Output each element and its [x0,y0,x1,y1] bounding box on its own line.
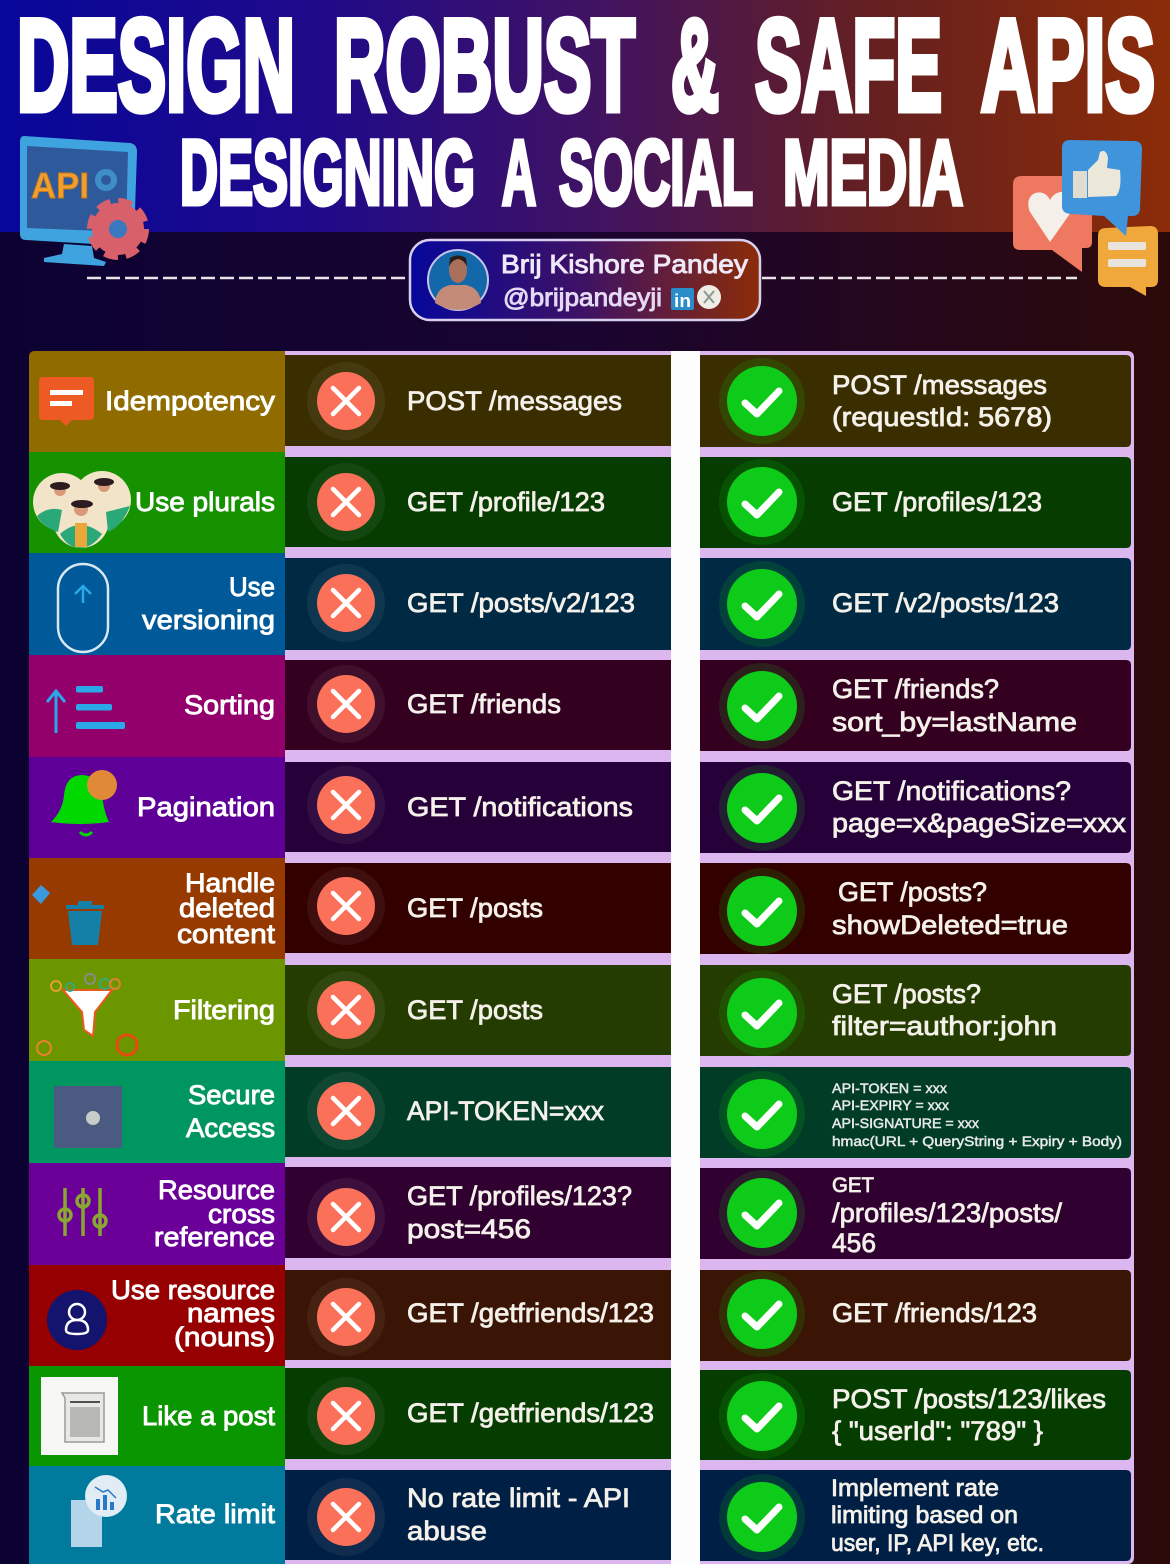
good example: GET /friends/123 [832,1298,1037,1328]
bad example: GET /posts [407,995,543,1025]
icon: rate chart [71,1475,127,1547]
good icon [719,459,805,545]
row 4: sorting [29,655,1131,757]
bad icon [307,1377,385,1455]
good example [832,877,1068,940]
bad icon [307,362,385,440]
label [111,1275,275,1352]
icon: social reactions [1013,140,1158,296]
row 6: handle deleted content [29,858,1131,959]
bad icon [307,1278,385,1356]
title [17,0,1155,138]
good example: GET /notifications? [832,776,1071,806]
icon: document [41,1377,118,1455]
label: (nouns) [174,1322,275,1352]
good example: POST /messages [832,370,1047,400]
label cell [29,1163,285,1265]
bad example: No rate limit - API [407,1483,630,1513]
good example: limiting based on [831,1502,1018,1529]
bad icon [307,463,385,541]
icon: scroll mouse [58,564,108,652]
label: cross [208,1199,275,1229]
label: Idempotency [105,386,276,416]
label cell [29,757,285,858]
good example: GET /posts? [832,979,981,1009]
label cell [29,553,285,655]
row 2: use plurals [29,452,1131,553]
good icon [719,970,805,1056]
subtitle: SOCIAL [559,122,753,224]
icon: bell [51,770,117,835]
label: Secure [188,1080,275,1110]
good example: hmac(URL + QueryString + Expiry + Body) [832,1133,1122,1149]
good example: POST /posts/123/likes [832,1384,1106,1414]
label: versioning [142,605,275,635]
icon: people [33,471,131,548]
bad example: API-TOKEN=xxx [407,1096,604,1126]
label cell [29,452,285,553]
label [177,868,276,949]
good icon [719,358,805,444]
good example: /profiles/123/posts/ [832,1198,1062,1228]
white column separator [671,351,700,1564]
bad icon [307,766,385,844]
icon: API monitor with gear: API [31,165,89,206]
row 7: filtering [29,959,1131,1061]
author handle: @brijpandeyji [503,284,662,312]
good icon [719,1170,805,1256]
good example [831,1475,1044,1557]
divider dashes left [87,277,408,279]
label: Like a post [142,1401,275,1431]
bad icon [307,564,385,642]
good example: API-EXPIRY = xxx [832,1097,949,1113]
good example: sort_by=lastName [832,707,1077,737]
icon: sort [47,686,125,733]
good example: filter=author:john [832,1011,1057,1041]
label cell [29,1466,285,1564]
label: Use [229,572,275,602]
good example [832,1080,1122,1149]
bad icon [307,665,385,743]
good icon [719,868,805,954]
bad example [407,1483,630,1546]
label [142,572,275,635]
bad example: GET /notifications [407,792,633,822]
bad icon [307,1072,385,1150]
bad example: GET /profiles/123? [407,1181,632,1211]
icon: x [697,285,721,309]
label: Access [186,1113,275,1143]
good example: GET [832,1174,874,1197]
label: Pagination [137,792,275,822]
good example [832,370,1052,432]
good example: page=x&pageSize=xxx [832,808,1127,838]
label cell [29,1265,285,1366]
label: deleted [179,893,275,923]
good example [832,979,1057,1041]
label: content [177,919,276,949]
good example [832,776,1127,838]
icon: funnel [37,974,137,1055]
icon: linkedin: in [674,291,691,311]
row 10: use resource names [29,1265,1131,1366]
good example: user, IP, API key, etc. [831,1530,1044,1557]
good icon [719,1474,805,1560]
label cell [29,858,285,959]
label: Rate limit [155,1499,276,1529]
label: names [187,1298,275,1328]
bad example [407,1181,632,1244]
icon: safe [54,1086,122,1148]
row 5: pagination [29,757,1131,858]
good icon [719,561,805,647]
good example: 456 [832,1228,876,1258]
good example: GET /posts? [838,877,987,907]
bad example: GET /posts [407,893,543,923]
label: reference [154,1222,275,1252]
good example: showDeleted=true [832,910,1068,940]
label cell [29,1366,285,1466]
good example: GET /v2/posts/123 [832,588,1059,618]
good example [832,1384,1106,1446]
row 3: use versioning [29,553,1131,655]
subtitle: MEDIA [783,122,963,224]
good example [832,1174,1062,1258]
subtitle [180,122,963,224]
icon: trash [32,885,104,945]
good example: GET /friends? [832,674,999,704]
bad example: GET /getfriends/123 [407,1298,654,1328]
label cell [29,1061,285,1163]
header band [0,0,1170,232]
icon: sliders [59,1188,106,1236]
bad example: GET /posts/v2/123 [407,588,635,618]
icon: message [39,377,94,426]
pink row backing [285,351,671,1564]
good icon [719,1373,805,1459]
label: Filtering [173,995,275,1025]
row 9: resource cross reference [29,1163,1131,1265]
row 11: like a post [29,1366,1131,1466]
bad example: GET /friends [407,689,561,719]
icon: user badge [47,1290,107,1350]
avatar [428,250,488,310]
good example: (requestId: 5678) [832,402,1052,432]
author name: Brij Kishore Pandey [501,249,748,279]
divider dashes right [762,277,1077,279]
label: Use resource [111,1275,275,1305]
bad example: GET /getfriends/123 [407,1398,654,1428]
right column backing [690,351,1134,1564]
bad example: POST /messages [407,386,622,416]
bad icon [307,867,385,945]
good example [832,674,1077,737]
icon: API monitor with gear [20,136,146,266]
bad example: post=456 [407,1214,531,1244]
good example: Implement rate [831,1475,999,1502]
good icon [719,1271,805,1357]
label cell [29,351,285,452]
bad icon [307,1178,385,1256]
label: Resource [158,1175,275,1205]
good example: GET /profiles/123 [832,487,1042,517]
bad example: abuse [407,1516,487,1546]
label [186,1080,275,1143]
subtitle: DESIGNING [180,122,475,224]
label: Sorting [184,690,275,720]
bad icon [307,971,385,1049]
label [154,1175,275,1252]
good example: API-TOKEN = xxx [832,1080,947,1096]
subtitle: A [502,122,536,224]
bad icon [307,1478,385,1556]
row 1: idempotency [29,351,1131,452]
icon: linkedin [671,288,694,311]
author badge [410,240,760,320]
good example: API-SIGNATURE = xxx [832,1115,979,1131]
row 8: secure access [29,1061,1131,1163]
bad example: GET /profile/123 [407,487,605,517]
label cell [29,959,285,1061]
label: Handle [185,868,275,898]
good icon [719,663,805,749]
good example: { "userId": "789" } [832,1416,1043,1446]
label cell [29,655,285,757]
good icon [719,1071,805,1157]
row 12: rate limit [29,1466,1131,1564]
label: Use plurals [135,487,275,517]
good icon [719,765,805,851]
